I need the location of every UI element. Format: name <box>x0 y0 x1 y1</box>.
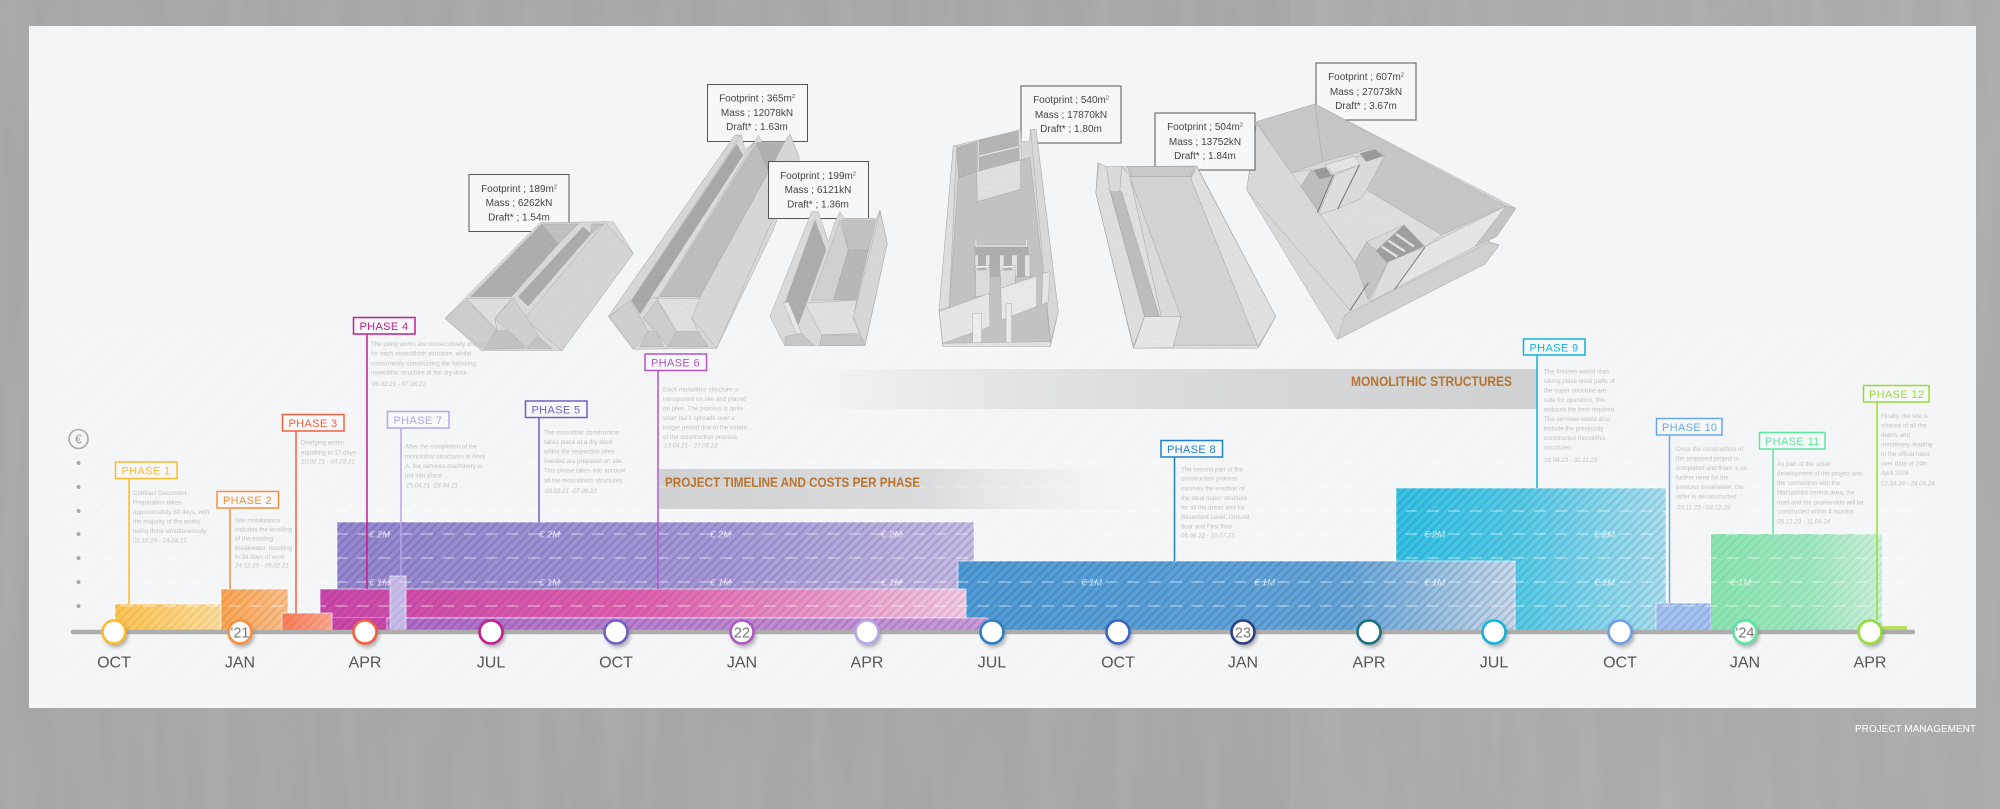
data box: structure 2: Footprint ; 365m <box>719 94 792 104</box>
data box: structure 1: Mass ; 6262kN <box>486 198 552 209</box>
phase 5 callout: 08.03.21 -07.06.22 <box>545 488 598 495</box>
footer label: PROJECT MANAGEMENT <box>1855 723 1977 735</box>
month labels: OCT <box>1603 654 1637 672</box>
month labels <box>97 654 1886 672</box>
milestone markers <box>102 620 1884 648</box>
phase 10 callout: Once the construction of <box>1676 446 1743 453</box>
phase 8 callout: Basement Level, Ground <box>1181 514 1250 521</box>
phase 4 callout: PHASE 4 <box>360 321 408 333</box>
month labels: APR <box>1353 654 1385 672</box>
phase 9 callout: 18.04.23 - 02.11.23 <box>1544 457 1598 464</box>
phase 9 callout: constructed monolithic <box>1544 435 1606 442</box>
section band: project timeline and costs <box>659 469 1139 509</box>
cost labels: € 1M <box>710 578 731 588</box>
model: structure 6 <box>1247 104 1516 339</box>
phase 9 callout <box>1524 339 1616 488</box>
month labels: OCT <box>1101 654 1135 672</box>
month labels: JUL <box>978 654 1006 672</box>
month labels: JAN <box>225 654 255 672</box>
data box: structure 6: Footprint ; 607m <box>1328 72 1401 83</box>
phase 10 callout: further need for the <box>1676 474 1729 481</box>
phase 2 callout: PHASE 2 <box>223 495 272 507</box>
phase 8 callout: 06.06.22 - 10.07.23 <box>1181 533 1235 540</box>
phase 12 callout: mechinery, leading <box>1881 442 1933 449</box>
model: structure 3 <box>770 210 887 346</box>
bar: phase 2 <box>221 589 288 631</box>
data box: structure 3: Draft* ; 1.36m <box>787 200 849 210</box>
phase 7 callout: 15.04.21 -28.04.21 <box>406 482 458 489</box>
milestone markers: '21 <box>231 626 249 642</box>
cost labels: € 1M <box>539 578 560 588</box>
model: structure 2 <box>608 134 799 349</box>
bar: phase 4 <box>320 589 966 631</box>
cost labels: € 1M <box>1594 578 1615 588</box>
phase 1 callout: the majority of the works <box>133 519 200 526</box>
cost labels: € 1M <box>369 578 390 588</box>
phase 4 callout: concurrently constructing the following <box>371 360 476 367</box>
phase 3 callout: equalling to 17 days <box>301 449 356 456</box>
phase 8 callout: the steel super structure <box>1181 495 1248 502</box>
cost labels <box>369 530 1751 588</box>
data box: structure 2: Draft* ; 1.63m <box>726 122 788 133</box>
data box: structure 6 <box>1316 63 1416 120</box>
phase 3 callout <box>282 414 356 613</box>
cost labels: € 1M <box>1254 578 1275 588</box>
cost labels: € 2M <box>369 530 390 540</box>
month labels: APR <box>349 654 381 672</box>
phase 5 callout <box>526 401 626 522</box>
phase 6 callout: PHASE 6 <box>651 358 700 370</box>
bar: phase 5 <box>337 522 974 602</box>
bar: phase 1 <box>115 604 221 631</box>
phase 6 callout: short but it spreads over a <box>663 415 735 422</box>
phase 9 callout: PHASE 9 <box>1530 342 1578 354</box>
model: structure 1 <box>445 222 633 351</box>
phase 9 callout: structures <box>1544 445 1571 452</box>
phase 3 callout: PHASE 3 <box>288 418 337 430</box>
phase 8 callout: construction process <box>1181 476 1238 483</box>
data box: structure 2 <box>708 84 808 142</box>
phase 11 callout: the connection with the <box>1777 480 1841 487</box>
phase 8 callout <box>1161 440 1250 561</box>
phase 5 callout: takes place at a dry dock <box>544 439 613 446</box>
data box: structure 2: Mass ; 12078kN <box>721 108 793 119</box>
phase 1 callout: approximately 60 days, with <box>133 509 210 516</box>
phase 7 callout: A, the services machinery is <box>405 463 482 470</box>
phase 2 callout: Site mobilisation <box>235 518 281 525</box>
cost labels: € 2M <box>539 530 560 540</box>
phase 9 callout: include the previously <box>1544 426 1604 433</box>
phase 1 callout: 01.10.20 - 24.04.21 <box>133 538 187 544</box>
data box: structure 4: Footprint ; 540m <box>1033 95 1106 106</box>
y-axis: euro icon and tick dots <box>69 430 88 608</box>
section band: monolithic structures: MONOLITHIC STRUCTURES <box>1351 373 1512 389</box>
month labels: JUL <box>1480 654 1508 672</box>
phase 9 callout: safe for operation, this <box>1544 397 1605 404</box>
month labels: OCT <box>599 654 633 672</box>
phase 12 callout: debris and <box>1881 432 1910 439</box>
phase 4 callout: 05.03.21 - 07.06.22 <box>372 381 426 388</box>
phase 5 callout: needed are prepared on site. <box>544 458 624 465</box>
phase 12 callout: 12.04.24 - 24.04.24 <box>1881 480 1935 487</box>
phase 2 callout: includes the levelling <box>235 527 293 534</box>
data box: structure 5: Footprint ; 504m <box>1167 122 1240 133</box>
phase 8 callout: floor and First floor <box>1181 524 1233 531</box>
cost labels: € 2M <box>1594 530 1615 540</box>
phase 1 callout: Contract Document <box>133 490 187 497</box>
phase 11 callout: 05.12.23 - 11.04.24 <box>1777 518 1831 525</box>
phase 12 callout: PHASE 12 <box>1869 389 1924 401</box>
data box: structure 6: Mass ; 27073kN <box>1330 87 1402 98</box>
data box: structure 3: Footprint ; 199m <box>780 171 853 182</box>
phase 10 callout <box>1656 418 1748 603</box>
phase 1 callout: PHASE 1 <box>122 466 170 478</box>
phase 2 callout: in 34 days of work <box>235 554 286 561</box>
phase 9 callout: reduces the time required. <box>1544 406 1616 413</box>
phase 4 callout: monolithic structure at the dry dock <box>371 370 468 377</box>
phase 11 callout: Marsaxlokk central area, the <box>1777 490 1855 497</box>
phase 6 callout: longer period due to the extent <box>663 424 747 431</box>
month labels: JAN <box>727 654 757 672</box>
bar: phase 10 <box>1656 603 1711 631</box>
chart: phase cost bars <box>115 488 1907 631</box>
bar: phase 8 <box>958 561 1515 631</box>
phase 8 callout: for all the areas and for <box>1181 504 1245 511</box>
bar: phase 7 <box>390 576 406 631</box>
cost labels: € 1M <box>1424 578 1445 588</box>
phase 11 callout: PHASE 11 <box>1765 436 1820 448</box>
milestone markers: '24 <box>1736 626 1754 642</box>
data box: structure 6: 2 <box>1401 72 1404 78</box>
month labels: APR <box>1854 654 1886 672</box>
phase 2 callout: of the existing <box>235 536 274 543</box>
phase 2 callout: 24.12.20 - 09.02.21 <box>234 563 289 570</box>
phase 11 callout: constructed within 4 months <box>1777 509 1854 516</box>
phase 7 callout: monolothic structures in Area <box>405 453 485 460</box>
phase 12 callout <box>1864 386 1935 620</box>
phase 7 callout: After the completion of the <box>405 444 478 451</box>
phase 10 callout: latter is deconstructed <box>1676 494 1737 501</box>
phase 9 callout: the super structure are <box>1544 387 1607 394</box>
data box: structure 4: Mass ; 17870kN <box>1035 110 1107 121</box>
phase 4 callout: The piling works are consecutively driven <box>371 341 484 348</box>
phase 5 callout: This phase takes into account <box>544 468 626 475</box>
model: structure 4 <box>939 129 1058 347</box>
phase 5 callout: PHASE 5 <box>532 404 580 416</box>
phase 1 callout: Preparation takes <box>133 500 182 507</box>
phase 11 callout: development of the project and <box>1777 471 1863 478</box>
phase 6 callout: transported on site and placed <box>663 396 747 403</box>
phase 6 callout <box>645 354 747 589</box>
timeline axis <box>73 620 1913 672</box>
bar: phase 12 <box>1882 626 1907 631</box>
cost labels: € 2M <box>1424 530 1445 540</box>
phase 8 callout: PHASE 8 <box>1167 444 1216 456</box>
data box: structure 5: Draft* ; 1.84m <box>1174 151 1236 162</box>
phase 3 callout: Dredging works <box>301 440 344 447</box>
data box: structure 1: Draft* ; 1.54m <box>488 212 550 224</box>
grid: cost dashed lines <box>100 463 1910 606</box>
phase 7 callout <box>388 412 485 576</box>
phase 11 callout <box>1760 432 1864 534</box>
data box: structure 6: Draft* ; 3.67m <box>1335 101 1397 112</box>
section band: project timeline and costs: PROJECT TIMELINE AND COSTS PER PHASE <box>665 474 920 490</box>
phase 11 callout: road and the promenade will be <box>1777 499 1864 506</box>
cost labels: € 1M <box>1730 578 1751 588</box>
phase 12 callout: April 2024 <box>1881 470 1909 477</box>
model: structure 5 <box>1096 163 1276 348</box>
phase 7 callout: put into place <box>405 472 442 479</box>
phase 12 callout: over date of 24th <box>1881 461 1928 468</box>
data box: structure 5 <box>1155 113 1255 170</box>
phase 10 callout: the proposed project is <box>1676 455 1739 462</box>
data box: structure 5: Mass ; 13752kN <box>1169 137 1241 148</box>
month labels: JUL <box>477 654 505 672</box>
phase 7 callout: PHASE 7 <box>394 415 442 427</box>
phase 5 callout: whilst the respective piles <box>543 449 614 456</box>
phase 1 callout: being done simultaneously. <box>133 528 208 535</box>
phase 6 callout: 13.04.21 - 27.06.22 <box>664 443 718 450</box>
data box: structure 3: 2 <box>853 172 856 178</box>
month labels: APR <box>851 654 883 672</box>
data box: structure 2: 2 <box>792 94 795 100</box>
bar: phase 11 <box>1711 534 1882 631</box>
bar: phase 9 <box>1396 488 1666 631</box>
phase 1 callout <box>116 462 210 604</box>
phase 5 callout: The monolithic construction <box>544 429 620 436</box>
cost labels: € 2M <box>710 530 731 540</box>
phase 4 callout <box>354 318 484 589</box>
cost labels: € 1M <box>881 578 902 588</box>
data box: structure 3 <box>768 162 868 218</box>
milestone markers: 22 <box>734 626 750 642</box>
phase 9 callout: taking place once parts of <box>1544 378 1615 385</box>
phase 9 callout: The services would also <box>1544 416 1611 423</box>
data box: structure 1 <box>469 174 569 232</box>
milestone markers: 23 <box>1235 626 1251 642</box>
data box: structure 1: Footprint ; 189m <box>481 184 554 195</box>
bar: phase 3 <box>282 613 332 631</box>
phase 11 callout: As part of the urban <box>1777 461 1832 468</box>
cost labels: € 1M <box>1081 578 1102 588</box>
structures group: models left <box>445 84 887 351</box>
phase 10 callout: completed and there is no <box>1676 465 1748 472</box>
cost labels: € 2M <box>881 530 902 540</box>
data box: structure 1: 2 <box>554 184 557 190</box>
phase 2 callout <box>217 492 293 589</box>
phase 4 callout: for each monolithich structure, whilst <box>371 351 471 358</box>
data box: structure 4: 2 <box>1106 96 1109 102</box>
phase 10 callout: 03.11.23 - 04.12.23 <box>1677 505 1731 512</box>
bar: phase 6 <box>387 618 988 631</box>
data box: structure 5: 2 <box>1240 122 1243 128</box>
phase 10 callout: PHASE 10 <box>1662 422 1717 434</box>
structures group: models right <box>939 63 1516 348</box>
phase 6 callout: of the construction process <box>663 434 737 441</box>
phase 12 callout: cleared of all the <box>1881 422 1927 429</box>
phase 8 callout: involves the erection of <box>1181 485 1245 492</box>
y-axis: euro icon and tick dots: € <box>75 432 82 446</box>
data box: structure 3: Mass ; 6121kN <box>785 185 851 196</box>
section band: monolithic structures <box>790 369 1537 409</box>
month labels: JAN <box>1730 654 1760 672</box>
phase 6 callout: Each monolithic structure is <box>663 386 739 393</box>
phase 2 callout: breakwater, resulting <box>235 545 293 552</box>
month labels: OCT <box>97 654 131 672</box>
phase 10 callout: previous breakwater, the <box>1676 484 1744 491</box>
data box: structure 4: Draft* ; 1.80m <box>1040 124 1102 135</box>
phase 5 callout: all the monolithich structures <box>544 477 622 484</box>
phase 8 callout: The second part of the <box>1181 466 1243 473</box>
phase 3 callout: 10.02.21 - 04.03.21 <box>301 459 355 466</box>
month labels: JAN <box>1228 654 1258 672</box>
phase 9 callout: The finishes would start <box>1544 368 1609 375</box>
phase 12 callout: to the offical hand <box>1881 451 1930 458</box>
phase 6 callout: on piles. The process is quite <box>663 405 744 412</box>
phase 12 callout: Finally, the site is <box>1881 413 1928 420</box>
data box: structure 4 <box>1021 86 1121 143</box>
